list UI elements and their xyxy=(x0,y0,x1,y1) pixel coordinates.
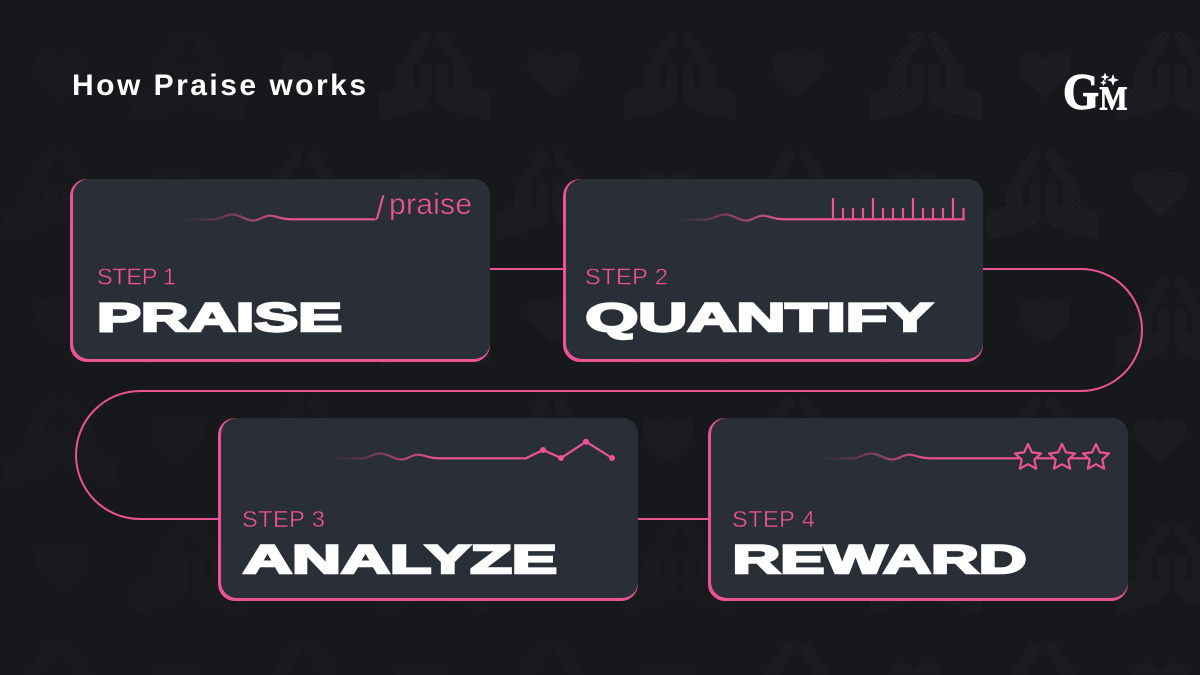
logo: GM xyxy=(1063,65,1128,121)
step label: STEP 1 xyxy=(97,264,176,290)
step name: PRAISE xyxy=(97,296,342,340)
step label: STEP 3 xyxy=(242,506,325,532)
title: How Praise works xyxy=(72,69,366,102)
praise command line graphic: praise xyxy=(389,188,472,221)
connector path between steps xyxy=(76,269,1142,519)
panel: step 3 analyze xyxy=(218,418,638,601)
panel: step 1 praise xyxy=(70,179,490,362)
praise command line graphic: / xyxy=(376,189,385,226)
line chart graphic xyxy=(330,439,615,461)
logo: GM: G xyxy=(1063,65,1099,121)
step name: REWARD xyxy=(732,538,1026,582)
step label: STEP 2 xyxy=(585,264,668,290)
logo: GM: M xyxy=(1100,80,1128,118)
stars line graphic xyxy=(821,444,1109,469)
ruler line graphic xyxy=(675,198,965,220)
panel: step 4 reward xyxy=(708,418,1128,601)
step name: ANALYZE xyxy=(243,538,557,582)
praise command line graphic xyxy=(182,188,472,226)
step label: STEP 4 xyxy=(732,506,815,532)
step name: QUANTIFY xyxy=(586,296,933,340)
panel: step 2 quantify xyxy=(563,179,983,362)
